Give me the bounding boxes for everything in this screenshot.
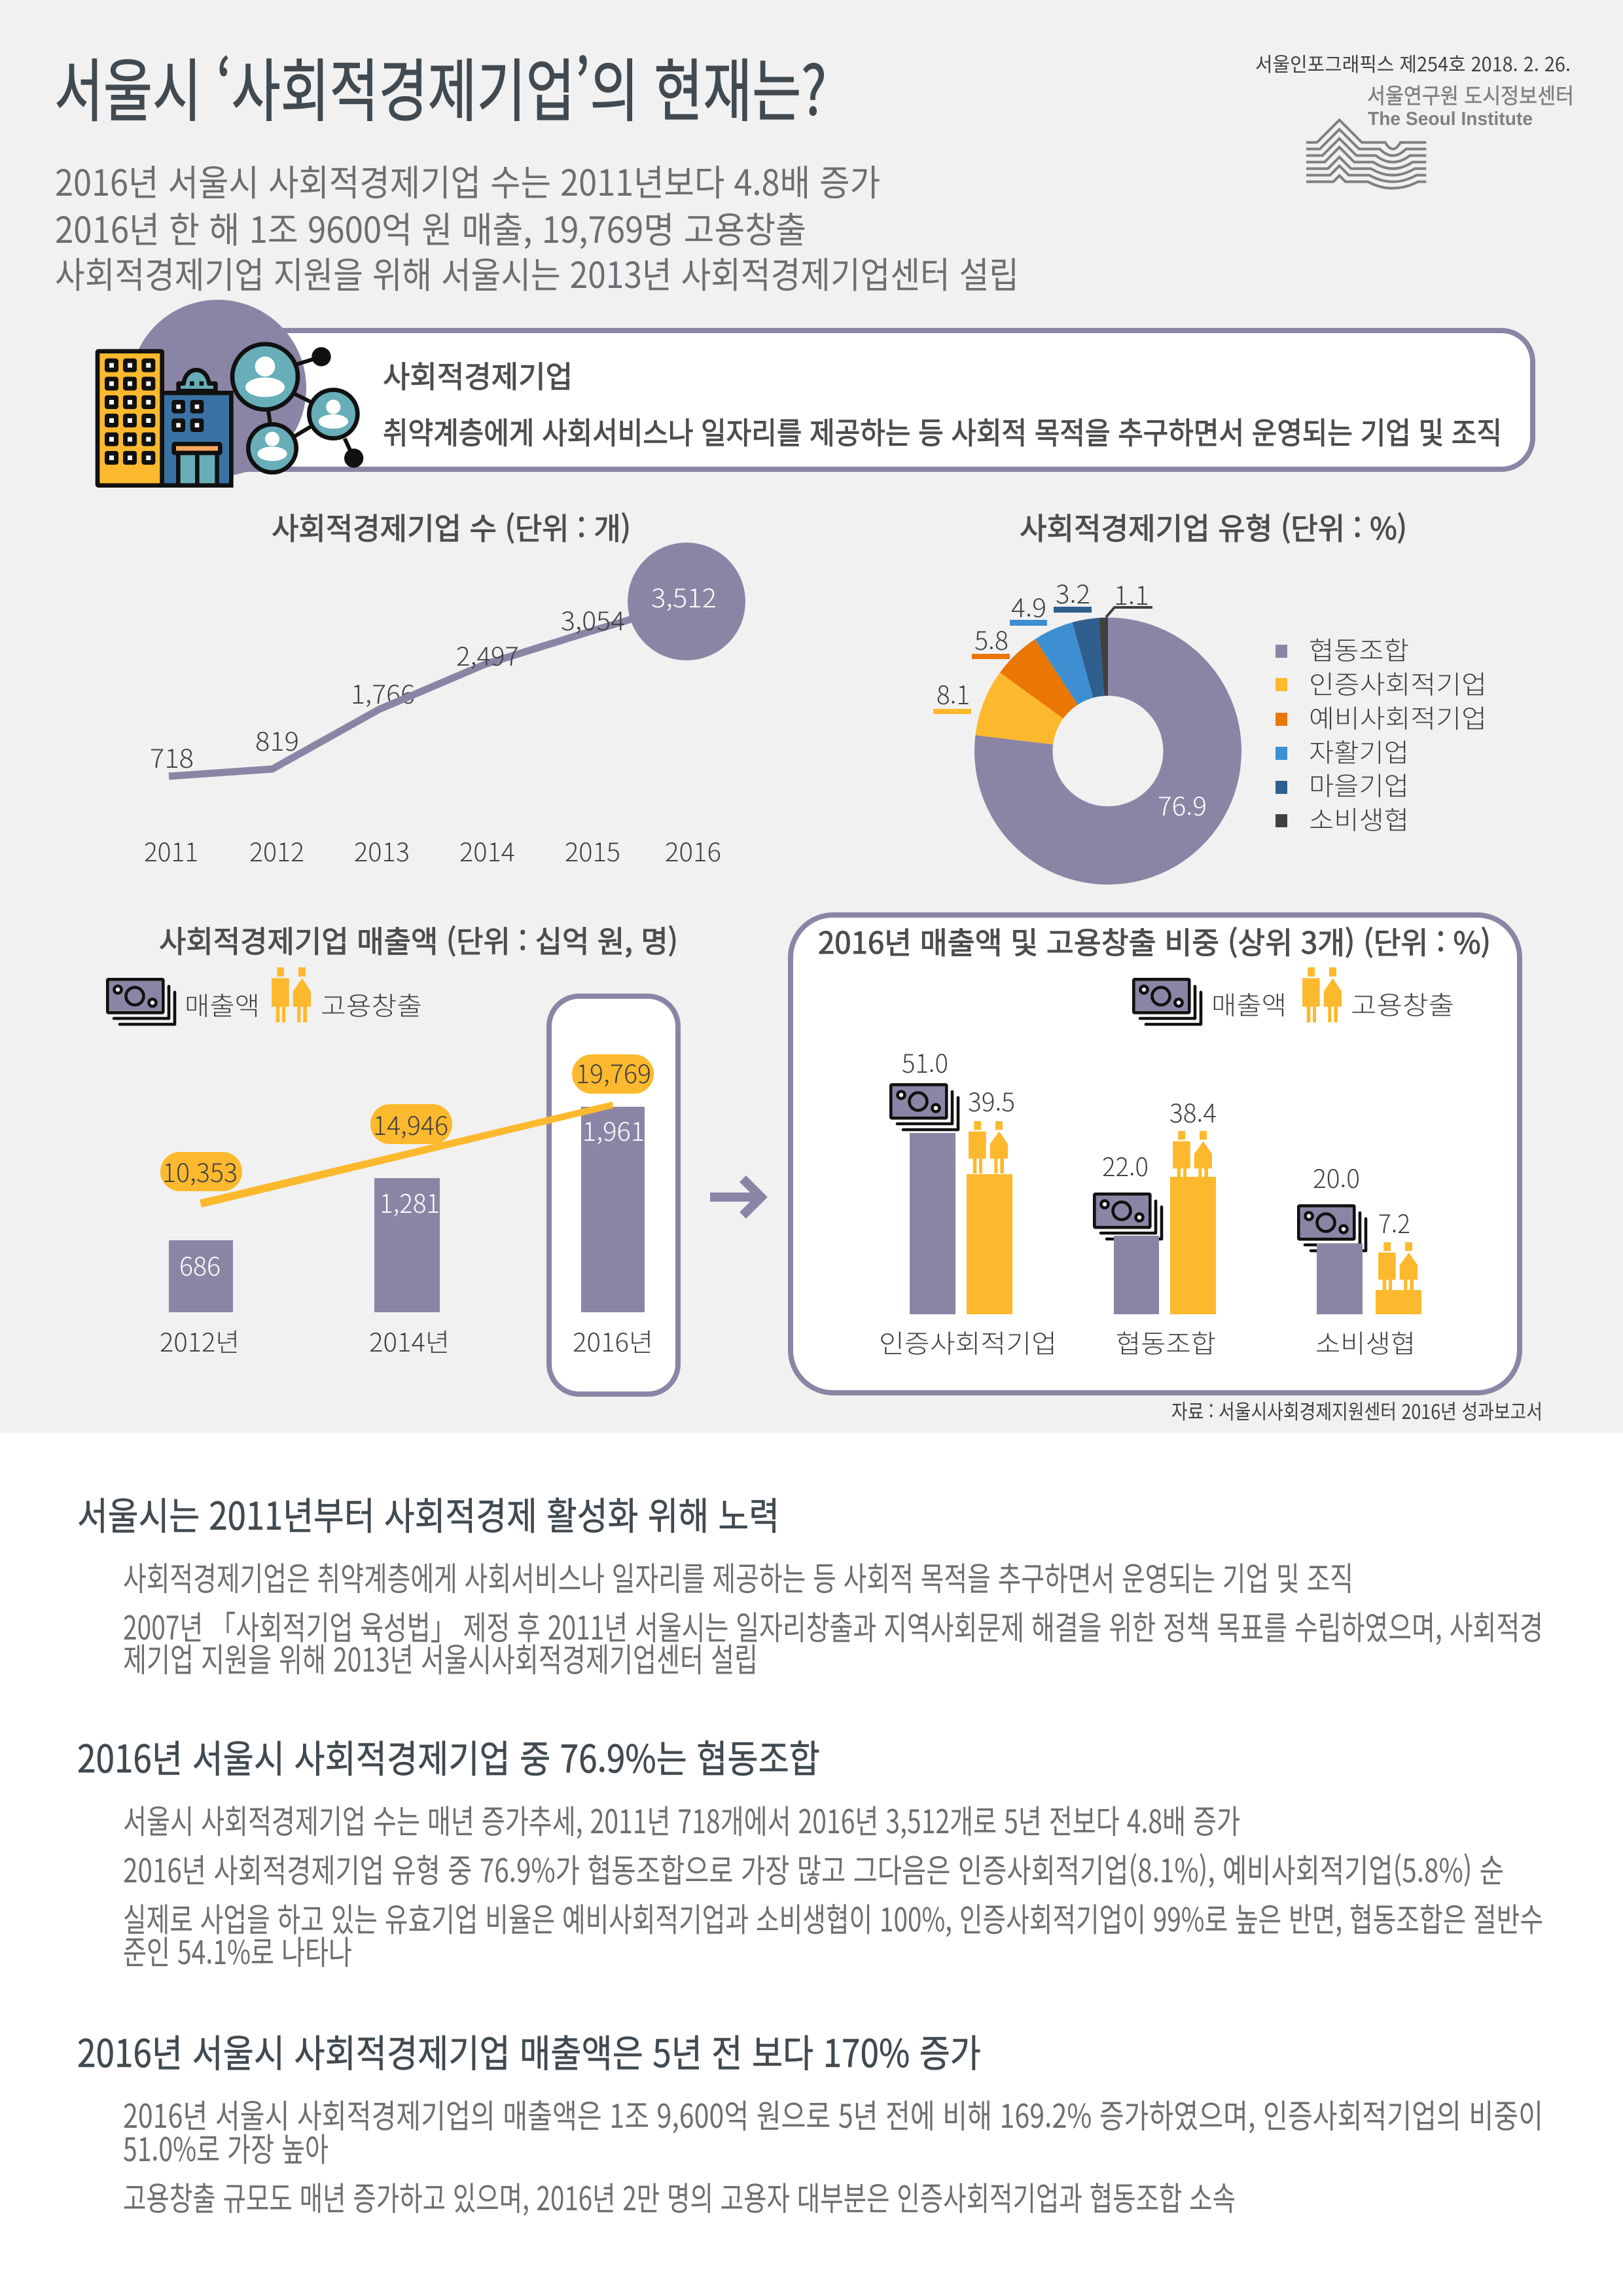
x axis years: 2011 — [144, 833, 198, 869]
group: 협동조합: 22.0 — [1102, 1147, 1149, 1184]
value labels: 2,497 — [456, 637, 519, 673]
donut value labels — [933, 575, 1207, 823]
value labels: 3,512 — [651, 579, 717, 615]
group: 소비생협: 20.0 — [1313, 1159, 1360, 1196]
group: 협동조합: 38.4 — [1169, 1094, 1217, 1130]
subtitle block — [55, 154, 1019, 298]
subtitle line 2: 2016년 한 해 1조 9600억 원 매출, 19,769명 고용창출 — [55, 201, 806, 253]
donut legend: 자활기업 — [1309, 733, 1409, 770]
arrow — [710, 1179, 761, 1215]
donut chart — [1014, 656, 1202, 846]
donut legend: 협동조합 — [1309, 631, 1409, 668]
employment value pills: 10,353 — [162, 1153, 238, 1190]
subtitle line 3: 사회적경제기업 지원을 위해 서울시는 2013년 사회적경제기업센터 설립 — [55, 246, 1019, 298]
source note: 자료 : 서울시사회경제지원센터 2016년 성과보고서 — [1171, 1395, 1543, 1425]
title: 서울시 ‘사회적경제기업’의 현재는? — [54, 36, 827, 135]
group: 협동조합: 협동조합 — [1116, 1324, 1216, 1361]
definition heading: 사회적경제기업 — [383, 353, 573, 397]
year labels: 2012년 — [160, 1323, 240, 1359]
panel frame — [791, 915, 1520, 1393]
x axis years: 2016 — [665, 833, 721, 869]
revenue value labels: 1,281 — [380, 1184, 440, 1221]
publisher Korean name: 서울연구원 도시정보센터 — [1367, 79, 1574, 110]
publisher name and logo — [1306, 79, 1574, 188]
logo — [1306, 120, 1426, 188]
2016 highlight box — [549, 996, 678, 1394]
panel legend: 고용창출 — [1351, 986, 1454, 1022]
panel: revenue and employment chart — [107, 918, 678, 1394]
2016 value circle — [628, 543, 745, 660]
employment value pills: 14,946 — [373, 1106, 448, 1143]
revenue value labels: 686 — [179, 1247, 221, 1283]
section 3 paragraph 1 — [123, 2090, 1543, 2171]
chart heading: 사회적경제기업 유형 (단위 : %) — [1020, 505, 1407, 548]
group: 인증사회적기업: 인증사회적기업 — [879, 1324, 1057, 1361]
year labels: 2014년 — [369, 1323, 450, 1359]
text section 1 — [77, 1486, 1543, 1681]
donut value labels: 5.8 — [974, 621, 1008, 658]
donut legend: 인증사회적기업 — [1309, 665, 1487, 702]
revenue value labels — [179, 1112, 645, 1283]
icon backdrop circle — [130, 300, 306, 476]
chart legend — [107, 967, 422, 1024]
value labels: 3,054 — [561, 601, 625, 638]
chart legend: 매출액 — [185, 986, 260, 1023]
employment value pills: 19,769 — [576, 1054, 651, 1091]
donut legend: 마을기업 — [1309, 766, 1409, 803]
panel: 2016 share of top three — [791, 915, 1520, 1393]
value labels — [150, 579, 717, 776]
donut value labels: 76.9 — [1158, 787, 1207, 823]
definition text: 취약계층에게 사회서비스나 일자리를 제공하는 등 사회적 목적을 추구하면서 운영되는 기업 및 조직 — [383, 410, 1502, 453]
revenue value labels: 1,961 — [582, 1112, 645, 1149]
issue and date: 서울인포그래픽스 제254호 2018. 2. 26. — [1255, 48, 1571, 77]
group: 인증사회적기업 — [879, 1044, 1057, 1361]
publisher English name: The Seoul Institute — [1368, 109, 1533, 130]
definition box — [196, 331, 1533, 469]
year labels: 2016년 — [573, 1323, 653, 1359]
group: 소비생협: 소비생협 — [1315, 1324, 1416, 1361]
group: 소비생협: 7.2 — [1378, 1204, 1410, 1241]
x axis years: 2015 — [565, 833, 620, 869]
panel heading: 2016년 매출액 및 고용창출 비중 (상위 3개) (단위 : %) — [818, 920, 1491, 963]
x axis years: 2013 — [354, 833, 410, 869]
panel: enterprise count line chart — [144, 505, 745, 869]
employment value pills — [160, 1054, 654, 1191]
chart legend: 고용창출 — [321, 986, 422, 1023]
chart heading: 사회적경제기업 매출액 (단위 : 십억 원, 명) — [159, 918, 678, 961]
value labels: 718 — [150, 739, 194, 776]
icon: buildings and people network — [98, 344, 363, 486]
x axis years: 2012 — [249, 833, 304, 869]
panel legend: 매출액 — [1211, 986, 1287, 1022]
panel legend — [1133, 967, 1454, 1024]
section 3 heading: 2016년 서울시 사회적경제기업 매출액은 5년 전 보다 170% 증가 — [77, 2023, 981, 2078]
group: 협동조합 — [1094, 1094, 1217, 1361]
section 1 heading: 서울시는 2011년부터 사회적경제 활성화 위해 노력 — [77, 1486, 779, 1541]
x axis years — [144, 833, 721, 869]
donut value labels: 8.1 — [936, 675, 970, 712]
employment trend line — [200, 1102, 613, 1208]
section 2 paragraph 3 — [123, 1894, 1543, 1974]
value label 2013: 1,766 — [351, 675, 415, 711]
section 3 paragraph 2: 고용창출 규모도 매년 증가하고 있으며, 2016년 2만 명의 고용자 대부분은 인증사회적기업과 협동조합 소속 — [123, 2173, 1236, 2220]
section 1 paragraph 2 — [123, 1602, 1543, 1681]
section 3 paragraph 1: 51.0%로 가장 높아 — [123, 2124, 329, 2171]
panel: definition — [98, 300, 1533, 486]
text section 2 — [77, 1729, 1543, 1974]
group: 인증사회적기업: 51.0 — [902, 1044, 948, 1081]
donut value labels: 3.2 — [1056, 575, 1090, 611]
section 1 paragraph 2: 제기업 지원을 위해 2013년 서울시사회적경제기업센터 설립 — [123, 1634, 758, 1681]
page background: grey upper area — [0, 0, 1623, 1433]
donut legend: 소비생협 — [1309, 800, 1409, 837]
section 2 paragraph 1: 서울시 사회적경제기업 수는 매년 증가추세, 2011년 718개에서 2016년 3,512개로 5년 전보다 4.8배 증가 — [123, 1796, 1240, 1843]
section 2 heading: 2016년 서울시 사회적경제기업 중 76.9%는 협동조합 — [77, 1729, 820, 1784]
year labels — [160, 1323, 653, 1359]
donut value labels: 1.1 — [1114, 576, 1149, 613]
x axis years: 2014 — [459, 833, 515, 869]
trend line — [169, 617, 638, 776]
chart heading: 사회적경제기업 수 (단위 : 개) — [272, 505, 631, 548]
group: 소비생협 — [1298, 1159, 1421, 1361]
donut legend — [1275, 631, 1487, 837]
donut value labels: 4.9 — [1011, 588, 1046, 625]
revenue bars — [169, 1107, 645, 1312]
group: 인증사회적기업: 39.5 — [968, 1083, 1015, 1119]
subtitle line 1: 2016년 서울시 사회적경제기업 수는 2011년보다 4.8배 증가 — [55, 154, 880, 206]
text section 3 — [77, 2023, 1543, 2220]
panel: enterprise type donut chart — [933, 505, 1487, 846]
donut legend: 예비사회적기업 — [1309, 699, 1487, 736]
section 2 paragraph 3: 준인 54.1%로 나타나 — [123, 1927, 352, 1974]
value labels: 819 — [255, 722, 299, 759]
